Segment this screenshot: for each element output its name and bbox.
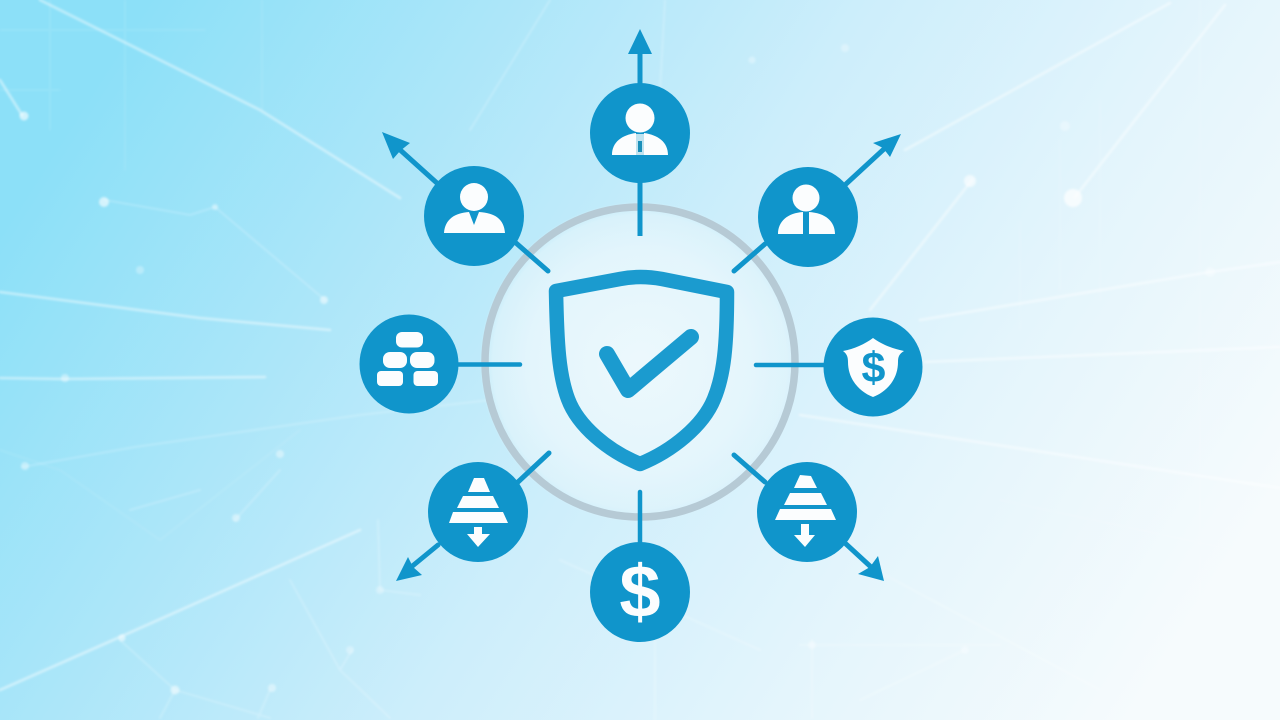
central shield with check mark (556, 277, 727, 464)
spoke: bottom-right pyramid with arrow (734, 455, 884, 581)
icon: dollar sign: $ (619, 550, 661, 633)
spoke: right shield with dollar: $ (862, 344, 886, 392)
spoke: top person with up arrow (590, 29, 690, 236)
spoke: bottom dollar (590, 492, 690, 642)
spoke: top-left person with arrow (382, 132, 548, 271)
shield outline (556, 277, 727, 464)
spoke: right shield with dollar (756, 318, 922, 416)
icon: person (778, 184, 835, 234)
spoke: left gold bars (360, 314, 520, 414)
icon: pyramid with down arrow (449, 478, 508, 547)
icon: pyramid with down arrow (775, 475, 836, 547)
icon: person (444, 183, 505, 233)
spoke: top-right person with arrow (734, 134, 901, 271)
check mark (607, 337, 691, 390)
icon: shield with dollar (843, 338, 904, 397)
spoke: bottom-left pyramid with arrow (396, 453, 549, 581)
icon: gold bars (377, 332, 438, 386)
hub glow inside ring (480, 202, 800, 522)
ring around shield (485, 207, 795, 517)
icon: person (612, 104, 668, 155)
